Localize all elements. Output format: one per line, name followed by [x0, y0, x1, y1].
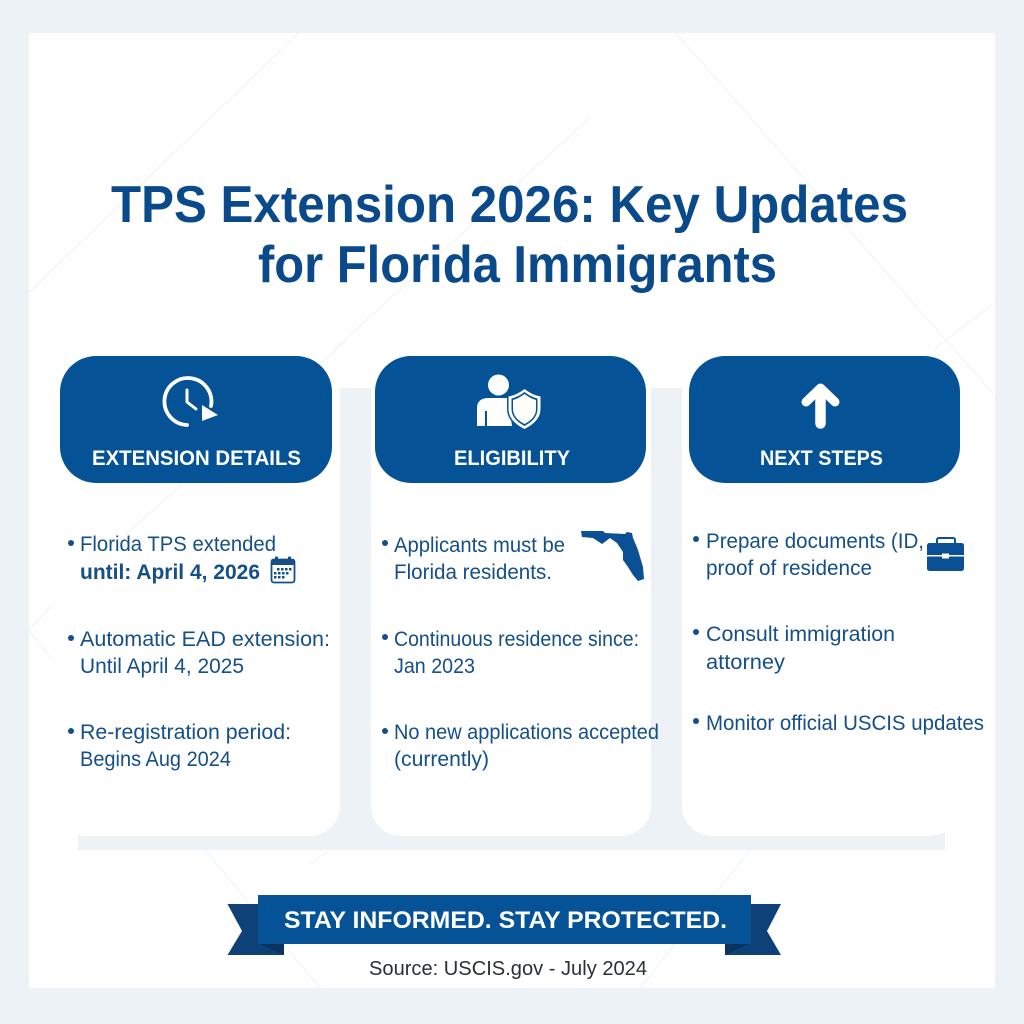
text: prepare documents: Prepare documents (ID,: [706, 530, 924, 553]
text: applicants must be florida residents: Florida residents.: [394, 561, 552, 584]
text: consult attorney: [693, 623, 895, 674]
text: continuous residence: [382, 628, 639, 678]
text: consult attorney: attorney: [706, 651, 786, 674]
banner ribbon: [228, 895, 781, 955]
title: TPS Extension 2026: Key Updates: [111, 176, 908, 234]
text: continuous residence: Continuous residence since:: [394, 628, 639, 651]
text: prepare documents: proof of residence: [706, 557, 872, 580]
text: applicants must be florida residents: Applicants must be: [394, 534, 565, 557]
icon: briefcase: [927, 538, 964, 571]
icon: florida map: [581, 531, 644, 581]
panel: next steps: [689, 356, 984, 735]
text: consult attorney: Consult immigration: [706, 623, 895, 646]
header: eligibility: [375, 356, 646, 483]
text: florida tps extended: Florida TPS extended: [80, 533, 276, 556]
text: automatic ead extension: Automatic EAD extension:: [80, 628, 330, 651]
text: automatic ead extension: [68, 628, 330, 678]
text: no new applications: No new applications accepted: [394, 721, 659, 744]
header: next steps: NEXT STEPS: [760, 447, 883, 470]
title: [111, 176, 908, 294]
header: extension details: EXTENSION DETAILS: [92, 447, 301, 470]
header: next steps: [689, 356, 960, 483]
text: automatic ead extension: Until April 4, 2025: [80, 655, 244, 678]
text: no new applications: [382, 721, 659, 771]
text: prepare documents: [693, 530, 924, 580]
source line: Source: USCIS.gov - July 2024: [369, 958, 647, 980]
header: extension details: [60, 356, 332, 483]
text: florida tps extended: [68, 533, 276, 584]
ribbon tails: [228, 904, 781, 955]
text: monitor uscis: Monitor official USCIS updates: [706, 712, 984, 735]
text: re-registration period: [68, 721, 291, 771]
banner ribbon: STAY INFORMED. STAY PROTECTED.: [284, 907, 727, 934]
text: continuous residence: Jan 2023: [394, 655, 475, 678]
title: for Florida Immigrants: [258, 236, 777, 294]
text: applicants must be florida residents: [382, 534, 565, 584]
icon: person with shield: [477, 374, 542, 431]
text: re-registration period: Begins Aug 2024: [80, 748, 231, 771]
icon: calendar: [271, 556, 295, 582]
text: no new applications: (currently): [394, 748, 489, 771]
header: eligibility: ELIGIBILITY: [454, 447, 570, 470]
text: florida tps extended: until: April 4, 2026: [80, 561, 260, 584]
panel: column backing: [78, 388, 945, 850]
panel: eligibility: [375, 356, 659, 771]
icon: up arrow: [806, 388, 835, 424]
icon: clock with arrow: [164, 378, 218, 425]
text: re-registration period: Re-registration period:: [80, 721, 291, 744]
panel: extension details: [60, 356, 332, 771]
